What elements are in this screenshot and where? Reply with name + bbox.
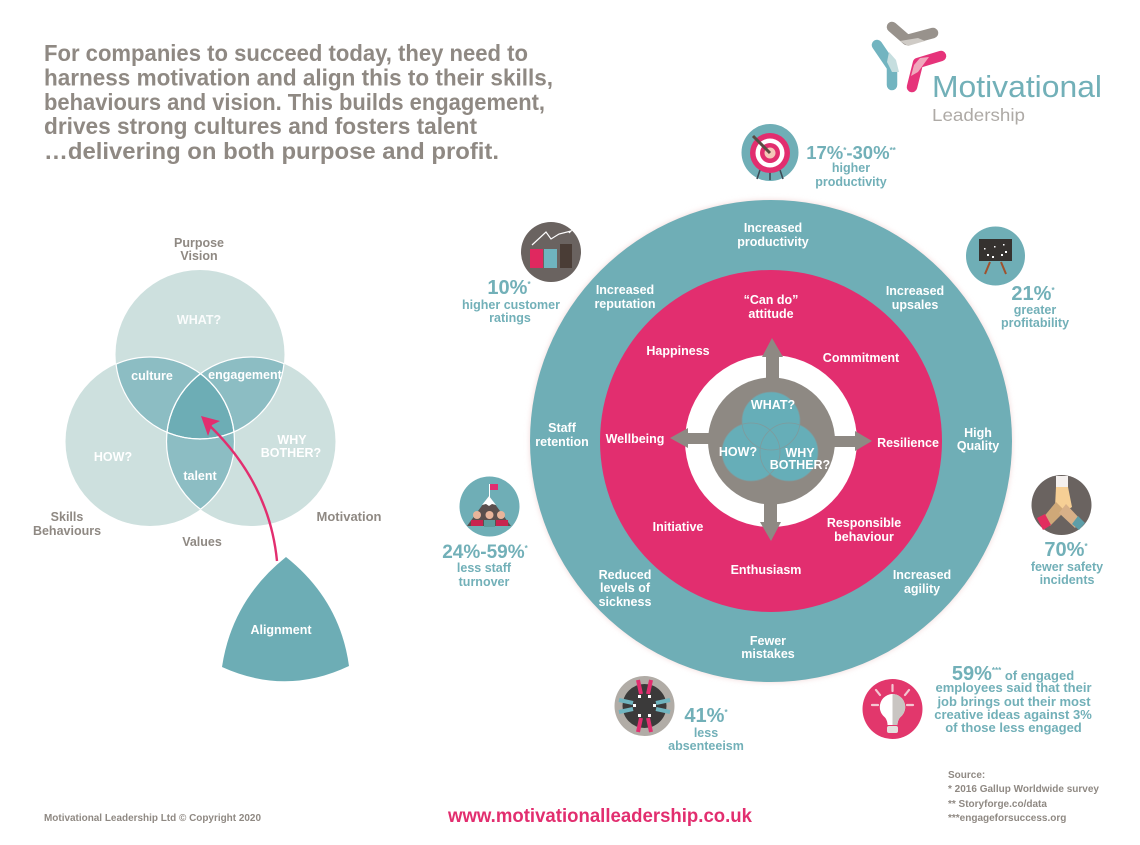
stat: customer ratings: higher customer [462, 298, 560, 312]
stat: customer ratings: * [527, 280, 531, 289]
stat: profitability: profitability [1001, 316, 1069, 330]
venn region labels: WHY [277, 433, 307, 447]
outer teal ring [530, 200, 1012, 682]
logo: Leadership [932, 105, 1025, 125]
stat: absenteeism: less [694, 726, 718, 740]
alignment shape: Alignment [250, 623, 312, 637]
outer ring labels: Quality [957, 439, 999, 453]
outer ring labels: mistakes [741, 647, 795, 661]
pink ring labels: Happiness [646, 344, 710, 358]
pink ring labels: Wellbeing [606, 432, 664, 446]
stat: safety incidents: 70% [1044, 539, 1084, 561]
headline: drives strong cultures and fosters talent [44, 113, 477, 139]
hub venn: BOTHER? [770, 458, 830, 472]
logo mark highlights [887, 38, 929, 76]
source notes: ***engageforsuccess.org [948, 813, 1066, 824]
logo mark [877, 27, 941, 87]
stat: absenteeism: 41% [684, 705, 724, 727]
outer ring labels: Increased [886, 284, 944, 298]
hub venn: WHY [785, 446, 815, 460]
headline: behaviours and vision. This builds engagement, [44, 89, 545, 115]
stat: productivity: -30% [846, 142, 890, 163]
stat: creative ideas: *** [992, 666, 1002, 675]
stat: creative ideas: of those less engaged [945, 720, 1082, 735]
logo wordmark: Motivational [932, 70, 1102, 104]
pink ring labels [606, 293, 939, 577]
stat: absenteeism: * [724, 708, 728, 717]
icon: target [742, 124, 798, 181]
outer ring labels: Increased [893, 568, 951, 582]
icon: light bulb [862, 679, 922, 739]
central hub [670, 338, 872, 541]
pink ring labels: behaviour [834, 530, 894, 544]
footer website: www.motivationalleadership.co.uk [447, 805, 752, 827]
hub venn [719, 392, 830, 481]
stat: absenteeism: absenteeism [668, 739, 744, 753]
venn outer labels [33, 236, 382, 549]
source notes: ** Storyforge.co/data [948, 799, 1047, 810]
outer ring labels: agility [904, 582, 940, 596]
outer ring labels: levels of [600, 581, 651, 595]
stat: productivity: 17% [806, 142, 843, 163]
outer ring labels [535, 221, 999, 661]
venn region labels: engagement [208, 368, 283, 382]
hub arrows [670, 338, 872, 541]
venn outer labels: Skills [51, 510, 83, 524]
pink ring labels: “Can do” [744, 293, 798, 307]
pink ring [600, 270, 942, 612]
headline: …delivering on both purpose and profit. [44, 138, 499, 164]
outer ring labels: retention [535, 435, 589, 449]
outer ring labels: productivity [737, 235, 809, 249]
stat: creative ideas: employees said that their [935, 680, 1092, 695]
stat: creative ideas: of engaged [1001, 668, 1074, 683]
pink ring labels: Enthusiasm [731, 563, 801, 577]
stat: productivity [742, 124, 897, 189]
venn region labels [94, 313, 321, 483]
icon: bar chart [521, 222, 581, 282]
stat: profitability [966, 226, 1069, 330]
stat: creative ideas: 59% [952, 663, 992, 685]
outer ring labels: High [964, 426, 992, 440]
venn outer labels: Values [182, 535, 222, 549]
stat: creative ideas: job brings out their most [936, 694, 1091, 709]
venn diagram [66, 270, 336, 526]
icon: team on mountain [460, 476, 520, 536]
stat: profitability: greater [1014, 303, 1056, 317]
stat: customer ratings: ratings [489, 311, 531, 325]
footer copyright: Motivational Leadership Ltd © Copyright 2020 [44, 813, 261, 824]
venn region labels: culture [131, 369, 173, 383]
stat: customer ratings: 10% [487, 277, 527, 299]
source notes: * 2016 Gallup Worldwide survey [948, 784, 1099, 795]
pink ring labels: Initiative [653, 520, 703, 534]
venn region labels: HOW? [94, 450, 132, 464]
stat: absenteeism [614, 676, 744, 753]
stat: staff turnover: less staff [457, 561, 512, 575]
outer ring labels: Staff [548, 421, 577, 435]
venn region labels: BOTHER? [261, 446, 321, 460]
headline: For companies to succeed today, they need to [44, 40, 528, 66]
outer ring labels: Fewer [750, 634, 786, 648]
pink ring labels: Resilience [877, 436, 939, 450]
outer ring labels: Increased [596, 283, 654, 297]
pink ring labels: Responsible [827, 516, 901, 530]
icon: meeting table [614, 676, 674, 736]
venn outer labels: Behaviours [33, 524, 101, 538]
icon: chalkboard [966, 226, 1025, 286]
icon: joined hands [1032, 475, 1092, 535]
outer ring labels: upsales [892, 298, 938, 312]
source notes [948, 770, 1099, 824]
stat: productivity: higher [832, 161, 870, 175]
stat: staff turnover: 24%-59% [442, 542, 525, 563]
stat: safety incidents: incidents [1040, 573, 1094, 587]
outer ring labels: Increased [744, 221, 802, 235]
logo [877, 27, 1102, 125]
headline: harness motivation and align this to their skills, [44, 64, 553, 90]
stat: profitability: * [1051, 286, 1055, 295]
stat: profitability: 21% [1011, 283, 1051, 305]
venn outer labels: Motivation [316, 510, 382, 524]
stat: productivity: ** [890, 146, 897, 155]
venn outer labels: Vision [180, 249, 218, 263]
source notes: Source: [948, 770, 985, 781]
stat: staff turnover [442, 476, 529, 589]
pink ring labels: attitude [748, 307, 794, 321]
stat: safety incidents: * [1084, 542, 1088, 551]
stat: creative ideas: creative ideas against 3% [934, 707, 1092, 722]
stat: safety incidents [1031, 475, 1103, 587]
venn outer labels: Purpose [174, 236, 224, 250]
stat: creative ideas [862, 663, 1092, 739]
arrow: alignment to centre [201, 416, 277, 561]
stat: customer ratings [462, 222, 581, 325]
alignment shape [222, 557, 349, 681]
stat: staff turnover: turnover [459, 575, 509, 589]
headline [44, 40, 553, 164]
outer ring labels: reputation [594, 297, 656, 311]
outer ring labels: sickness [599, 595, 651, 609]
pink ring labels: Commitment [823, 351, 900, 365]
stat: productivity: productivity [815, 175, 887, 189]
hub venn: WHAT? [751, 398, 795, 412]
stat: staff turnover: * [525, 544, 529, 553]
outer ring labels: Reduced [599, 568, 651, 582]
stat: safety incidents: fewer safety [1031, 560, 1103, 574]
venn region labels: WHAT? [177, 313, 221, 327]
venn region labels: talent [183, 469, 218, 483]
hub venn: HOW? [719, 445, 757, 459]
stat: productivity: * [843, 146, 847, 155]
